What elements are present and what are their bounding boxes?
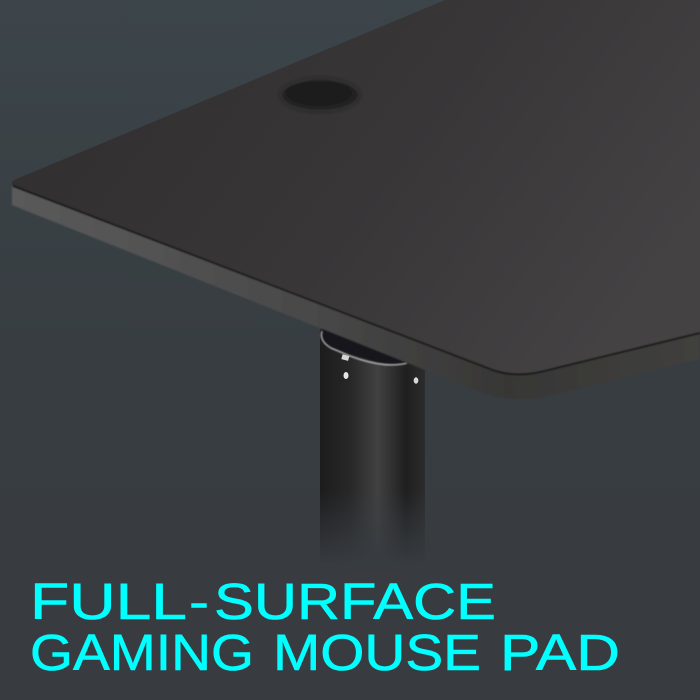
title line 2: GAMING xyxy=(30,624,254,681)
cable grommet xyxy=(279,77,361,113)
title line 2: PAD xyxy=(500,624,620,681)
surface edge line xyxy=(13,186,700,374)
title line 1: - xyxy=(189,573,209,630)
desk surface xyxy=(12,0,700,374)
title line 1: FULL xyxy=(30,573,187,630)
title xyxy=(30,573,620,681)
title line 1: SURFACE xyxy=(214,573,496,630)
desk edge xyxy=(12,186,700,399)
desk leg xyxy=(320,310,425,565)
leg bracket xyxy=(320,310,425,384)
desk xyxy=(12,0,700,399)
title line 2: MOUSE xyxy=(273,624,481,681)
